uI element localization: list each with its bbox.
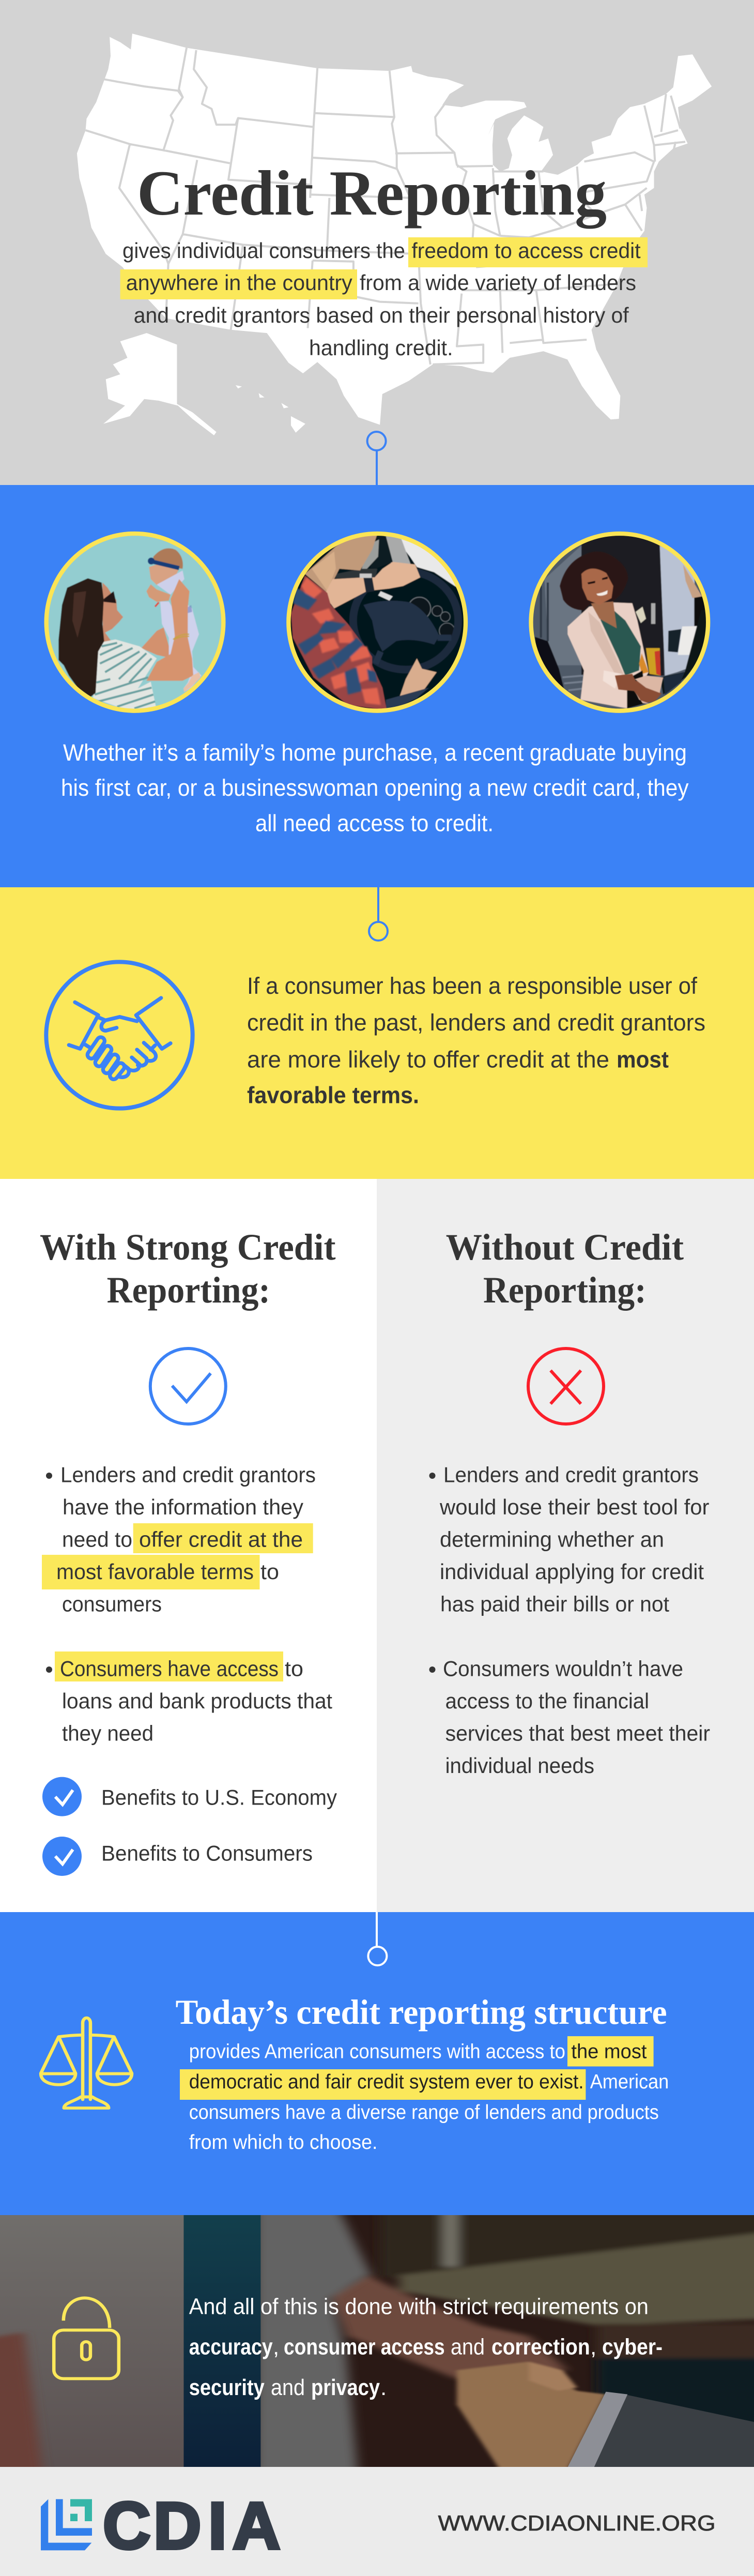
responsible user text: [247, 973, 705, 1109]
requirements text: accuracy: [189, 2335, 273, 2360]
body text: American: [590, 2071, 669, 2093]
bullets: to: [260, 1559, 279, 1584]
bullets: most favorable terms: [56, 1559, 254, 1584]
panel: strict requirements photo: [0, 2205, 754, 2480]
bullets: [42, 1463, 332, 1746]
benefit: consumers: Benefits to Consumers: [101, 1841, 313, 1866]
panel: who needs credit: [0, 485, 754, 887]
bullets: need to: [62, 1527, 132, 1552]
intro text: [120, 237, 648, 360]
panel: without credit reporting: [377, 1179, 754, 1912]
connector: [369, 887, 388, 941]
panel: map header: [0, 0, 754, 485]
bullets: individual applying for credit: [440, 1559, 704, 1584]
heading: [40, 1226, 336, 1311]
bullets: consumers: [62, 1592, 162, 1616]
bullets: [429, 1463, 710, 1778]
logo wordmark: CDIA: [103, 2489, 280, 2563]
bullets: offer credit at the: [139, 1527, 303, 1552]
Alaska and Hawaii: [103, 333, 305, 435]
logo mark: [41, 2499, 92, 2550]
body text: democratic and fair credit system ever to exist.: [189, 2071, 584, 2093]
heading: Without Credit: [446, 1226, 684, 1268]
body text: the most: [571, 2041, 647, 2063]
background photo: handshake: [0, 2205, 754, 2480]
photo: businesswoman handshake: [529, 531, 715, 714]
heading: Reporting:: [107, 1269, 270, 1311]
bullets: individual needs: [445, 1753, 594, 1778]
responsible user text: credit in the past, lenders and credit grantors: [247, 1009, 705, 1036]
bullets: to: [285, 1657, 303, 1681]
requirements text: And all of this is done with strict requirements on: [189, 2294, 649, 2320]
requirements text: security: [189, 2375, 265, 2400]
panel: with strong credit reporting: [0, 1179, 377, 1912]
bullets: Consumers have access: [60, 1657, 279, 1681]
highlight: [408, 237, 648, 267]
benefit: consumers: [42, 1837, 313, 1876]
panel: favorable terms: [0, 887, 754, 1179]
requirements text: and: [271, 2375, 305, 2400]
requirements text: ,: [590, 2335, 596, 2360]
caption text: [61, 739, 689, 837]
highlight: [133, 1523, 313, 1553]
bullets: Lenders and credit grantors: [443, 1463, 699, 1487]
heading: Today’s credit reporting structure: [176, 1992, 667, 2032]
bullets: have the information they: [63, 1495, 303, 1519]
intro text: gives individual consumers the: [122, 238, 405, 263]
website: WWW.CDIAONLINE.ORG: [438, 2511, 716, 2535]
heading: Reporting:: [483, 1269, 647, 1311]
ring: [47, 534, 223, 711]
icon: handshake: [46, 962, 193, 1109]
highlight: [55, 1651, 283, 1681]
bullets: Consumers wouldn’t have: [443, 1657, 683, 1681]
body text: consumers have a diverse range of lenders and products: [189, 2101, 659, 2124]
caption text: his first car, or a businesswoman opening a new credit card, they: [61, 775, 689, 801]
icon: lock: [54, 2298, 119, 2378]
icon: scales: [41, 2018, 132, 2108]
responsible user text: favorable terms.: [247, 1082, 419, 1109]
intro text: handling credit.: [309, 336, 453, 360]
heading: With Strong Credit: [40, 1226, 336, 1268]
caption text: Whether it’s a family’s home purchase, a recent graduate buying: [63, 739, 687, 766]
responsible user text: most: [617, 1047, 669, 1073]
bullets: has paid their bills or not: [440, 1592, 669, 1616]
requirements text: ,: [273, 2335, 279, 2360]
requirements text: [189, 2294, 663, 2400]
icon: cross: [528, 1348, 604, 1424]
requirements text: correction: [491, 2335, 590, 2360]
ring: [531, 534, 708, 711]
requirements text: privacy: [311, 2375, 380, 2400]
panel: today's credit reporting structure: [0, 1912, 754, 2215]
heading: [446, 1226, 684, 1311]
requirements text: cyber-: [602, 2335, 663, 2360]
ring: [288, 534, 466, 711]
highlight: [567, 2036, 654, 2066]
body text: [180, 2036, 669, 2154]
intro text: freedom to access credit: [411, 238, 641, 263]
intro text: and credit grantors based on their personal history of: [134, 303, 629, 327]
photo: mother and baby: [43, 531, 229, 714]
requirements text: .: [380, 2375, 387, 2400]
benefit: U.S. economy: [42, 1777, 337, 1816]
highlight: [120, 269, 357, 299]
intro text: from a wide variety of lenders: [360, 270, 636, 295]
panel: footer: [0, 2467, 754, 2576]
responsible user text: are more likely to offer credit at the: [247, 1047, 609, 1073]
connector: [367, 432, 386, 485]
bullets: loans and bank products that: [62, 1689, 332, 1713]
highlight: [42, 1555, 259, 1589]
body text: provides American consumers with access to: [189, 2041, 565, 2063]
icon: check: [150, 1348, 226, 1424]
intro text: anywhere in the country: [126, 270, 352, 295]
bullets: determining whether an: [440, 1527, 664, 1552]
bullets: Lenders and credit grantors: [60, 1463, 316, 1487]
bullets: services that best meet their: [445, 1721, 710, 1746]
photo: driver at wheel: [286, 531, 472, 714]
responsible user text: If a consumer has been a responsible user of: [247, 973, 697, 999]
benefit: U.S. economy: Benefits to U.S. Economy: [101, 1785, 337, 1810]
bullets: they need: [62, 1721, 153, 1746]
requirements text: and: [451, 2335, 485, 2360]
body text: from which to choose.: [189, 2131, 377, 2154]
requirements text: consumer access: [284, 2335, 445, 2360]
caption text: all need access to credit.: [255, 810, 494, 837]
bullets: would lose their best tool for: [439, 1495, 710, 1519]
connector: [368, 1912, 387, 1965]
highlight: [180, 2069, 586, 2100]
title: Credit Reporting: [137, 158, 607, 229]
map of the United States: [77, 34, 712, 435]
bullets: access to the financial: [445, 1689, 649, 1713]
